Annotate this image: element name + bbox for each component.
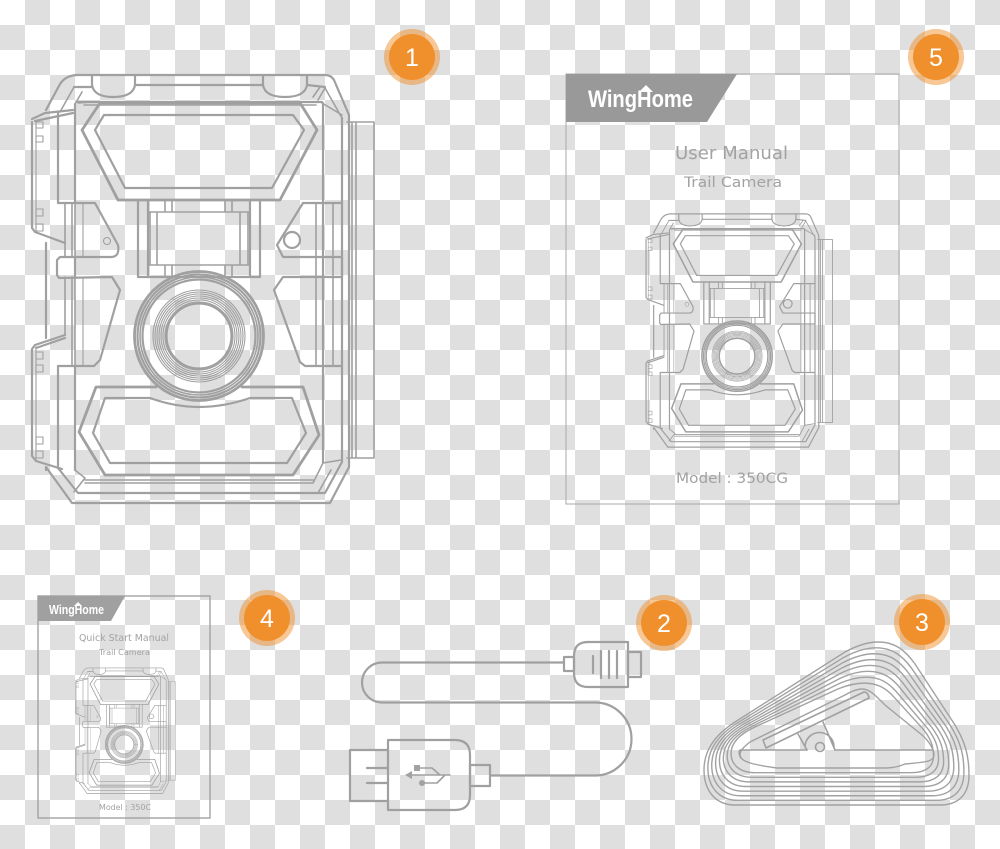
icon: usb symbol (405, 765, 450, 786)
badge 1: 1 (405, 44, 419, 72)
item 1: trail camera (32, 75, 374, 503)
item 3: mounting strap with clip (704, 642, 969, 805)
item 4: quick start manual (38, 596, 210, 818)
buckle clip (739, 692, 933, 758)
quick start model label: Model : 350C (99, 803, 151, 812)
badge 3 (894, 594, 950, 650)
badge 1 (384, 29, 440, 85)
usb plug (350, 740, 490, 810)
item 2: usb cable (350, 642, 641, 810)
coiled strap (704, 642, 969, 805)
brand logo: WingHome (588, 86, 693, 113)
quick start page outline (38, 596, 210, 818)
manual camera drawing (646, 214, 832, 447)
quick start title: Quick Start Manual (79, 633, 169, 644)
manual page outline (566, 74, 899, 504)
badge 3: 3 (915, 609, 929, 637)
item 5: user manual (566, 74, 899, 504)
quick start subtitle: Trail Camera (98, 648, 150, 657)
badge 4 (239, 590, 295, 646)
badge 2: 2 (657, 610, 671, 638)
quick start camera drawing (75, 668, 176, 793)
model label: Model : 350CG (676, 471, 788, 487)
manual subtitle: Trail Camera (683, 175, 782, 191)
badge 2 (636, 595, 692, 651)
small connector (564, 642, 641, 687)
badge 5 (908, 29, 964, 85)
quick start logo: WingHome (49, 602, 104, 617)
badge 4: 4 (260, 605, 274, 633)
cable line (362, 662, 632, 776)
quick start header banner (38, 596, 125, 621)
manual header banner (566, 74, 737, 122)
manual title: User Manual (675, 143, 788, 164)
badge 5: 5 (929, 44, 943, 72)
